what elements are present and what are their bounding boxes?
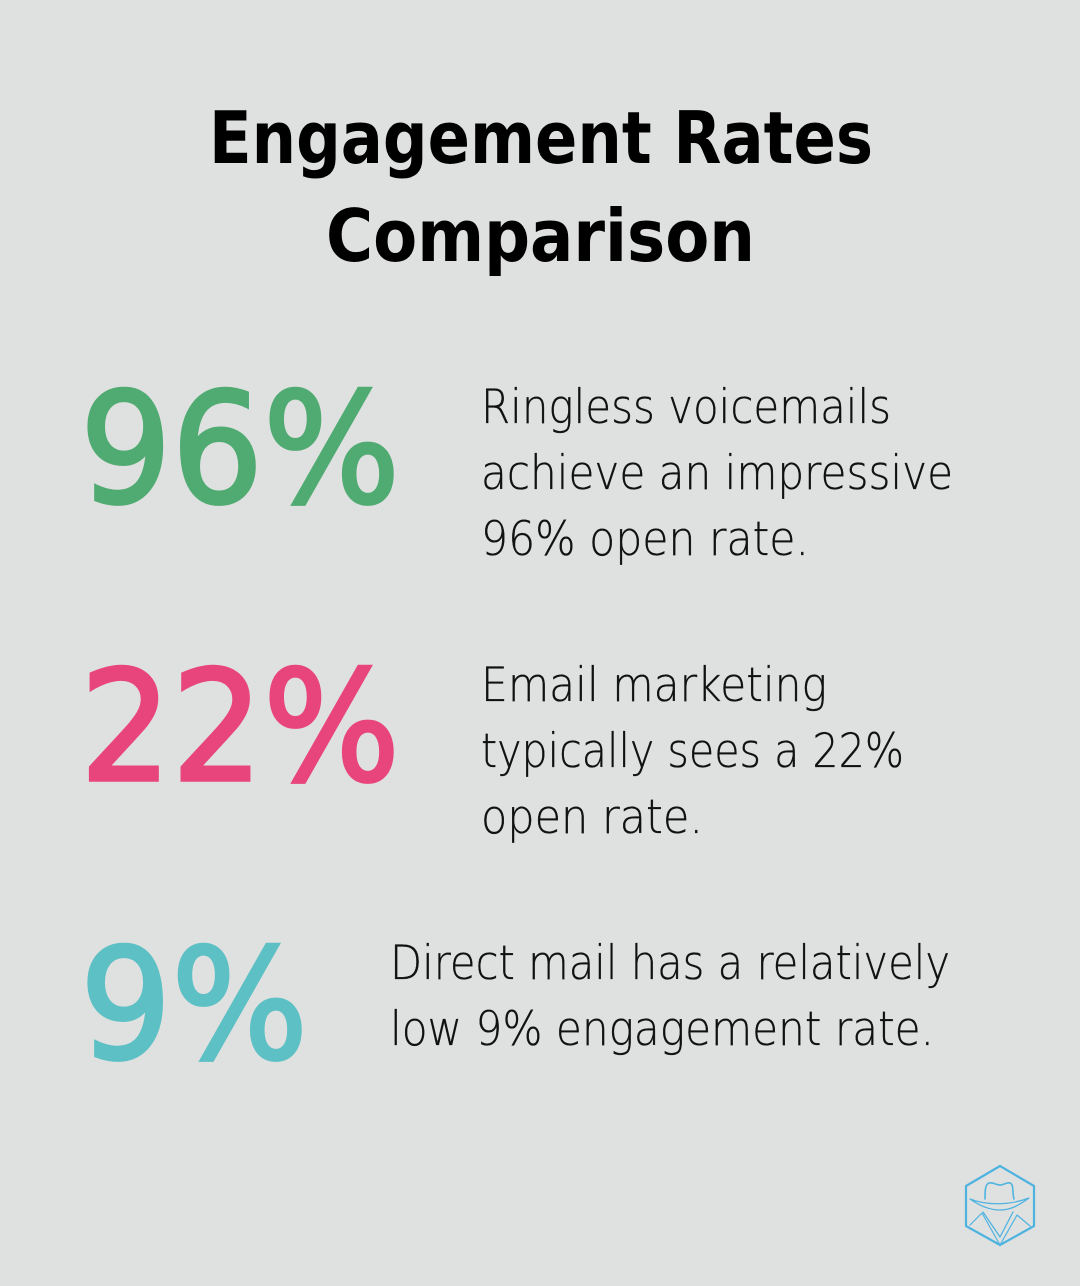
title: Engagement Rates xyxy=(209,96,873,180)
text block: email marketing: Email marketing xyxy=(481,658,827,713)
title: Comparison xyxy=(326,194,755,278)
text block: ringless voicemails xyxy=(481,380,953,567)
text block: direct mail xyxy=(390,936,950,1057)
text block: email marketing xyxy=(481,658,904,845)
text block: ringless voicemails: Ringless voicemails xyxy=(481,380,891,435)
text block: ringless voicemails: 96% open rate. xyxy=(481,512,809,567)
text block: email marketing: open rate. xyxy=(481,790,703,845)
text block: ringless voicemails: achieve an impressive xyxy=(481,446,953,501)
statistic: 96%: 96% xyxy=(80,361,400,539)
text block: direct mail: Direct mail has a relatively xyxy=(390,936,950,991)
text block: direct mail: low 9% engagement rate. xyxy=(390,1002,934,1057)
statistic: 9%: 9% xyxy=(80,917,308,1095)
title xyxy=(209,96,873,278)
text block: email marketing: typically sees a 22% xyxy=(481,724,904,779)
statistic: 22%: 22% xyxy=(80,639,400,817)
icon: logo hexagon with hat xyxy=(966,1166,1034,1245)
